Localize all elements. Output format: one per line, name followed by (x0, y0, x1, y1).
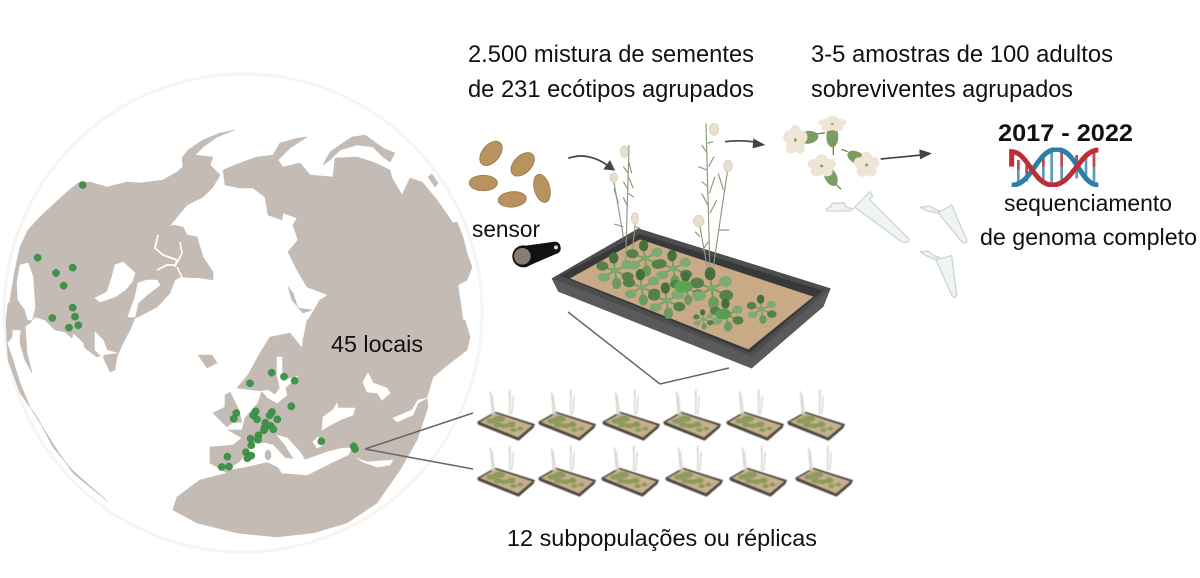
rosettes (596, 240, 777, 331)
heading: seed mix: 2.500 mistura de sementes (468, 41, 754, 68)
tray with plants (552, 123, 831, 368)
caption: replicates: 12 subpopulações ou réplicas (507, 525, 817, 551)
arrow: flowers to sequencing (881, 149, 932, 159)
date range: 2017 - 2022 (998, 120, 1133, 147)
arrow: seeds to tray (568, 156, 615, 171)
icon: flower samples (782, 116, 881, 189)
globe map (4, 74, 482, 552)
label: sensor: sensor (472, 216, 540, 242)
flowers on stems (610, 123, 732, 227)
caption: sequencing: sequenciamento (1004, 190, 1172, 216)
land: Novaya Zemlya arc (288, 287, 312, 313)
icon: sensor (512, 242, 561, 267)
heading: survivor samples: 3-5 amostras de 100 adultos (811, 41, 1113, 68)
land: far eastern islands (428, 174, 438, 187)
land: Siberian arc (323, 135, 395, 165)
land: North America (8, 130, 235, 372)
land: United Kingdom and Ireland (213, 392, 242, 427)
land: Central America strip (6, 303, 15, 343)
land: Mediterranean islands (265, 450, 271, 460)
heading: seed mix second line: de 231 ecótipos agrupados (468, 76, 754, 103)
caption: whole genome: de genoma completo (980, 224, 1197, 250)
sampling sites (34, 181, 359, 471)
arrow: plants to flowers (725, 138, 765, 148)
water: seas, bays and channels (17, 235, 427, 475)
icon: DNA helix (1012, 149, 1098, 185)
tray row 2 (477, 445, 853, 497)
replicate trays grid (477, 389, 853, 497)
land: Iceland (198, 355, 217, 368)
land: South America edge (7, 343, 107, 501)
icon: sample tubes (826, 192, 967, 297)
heading: survivor samples second line: sobreviventes agrupados (811, 76, 1073, 103)
icon: seeds (469, 137, 553, 208)
tray row 1 (477, 389, 845, 441)
land: Caribbean sliver (20, 310, 32, 373)
connector lines from site to replicates (365, 413, 473, 469)
land: Eurasia and Africa (173, 137, 472, 537)
bracket linking tray to replicates (568, 312, 729, 384)
stems (613, 123, 729, 273)
label: 45 locais: 45 locais (331, 331, 423, 357)
